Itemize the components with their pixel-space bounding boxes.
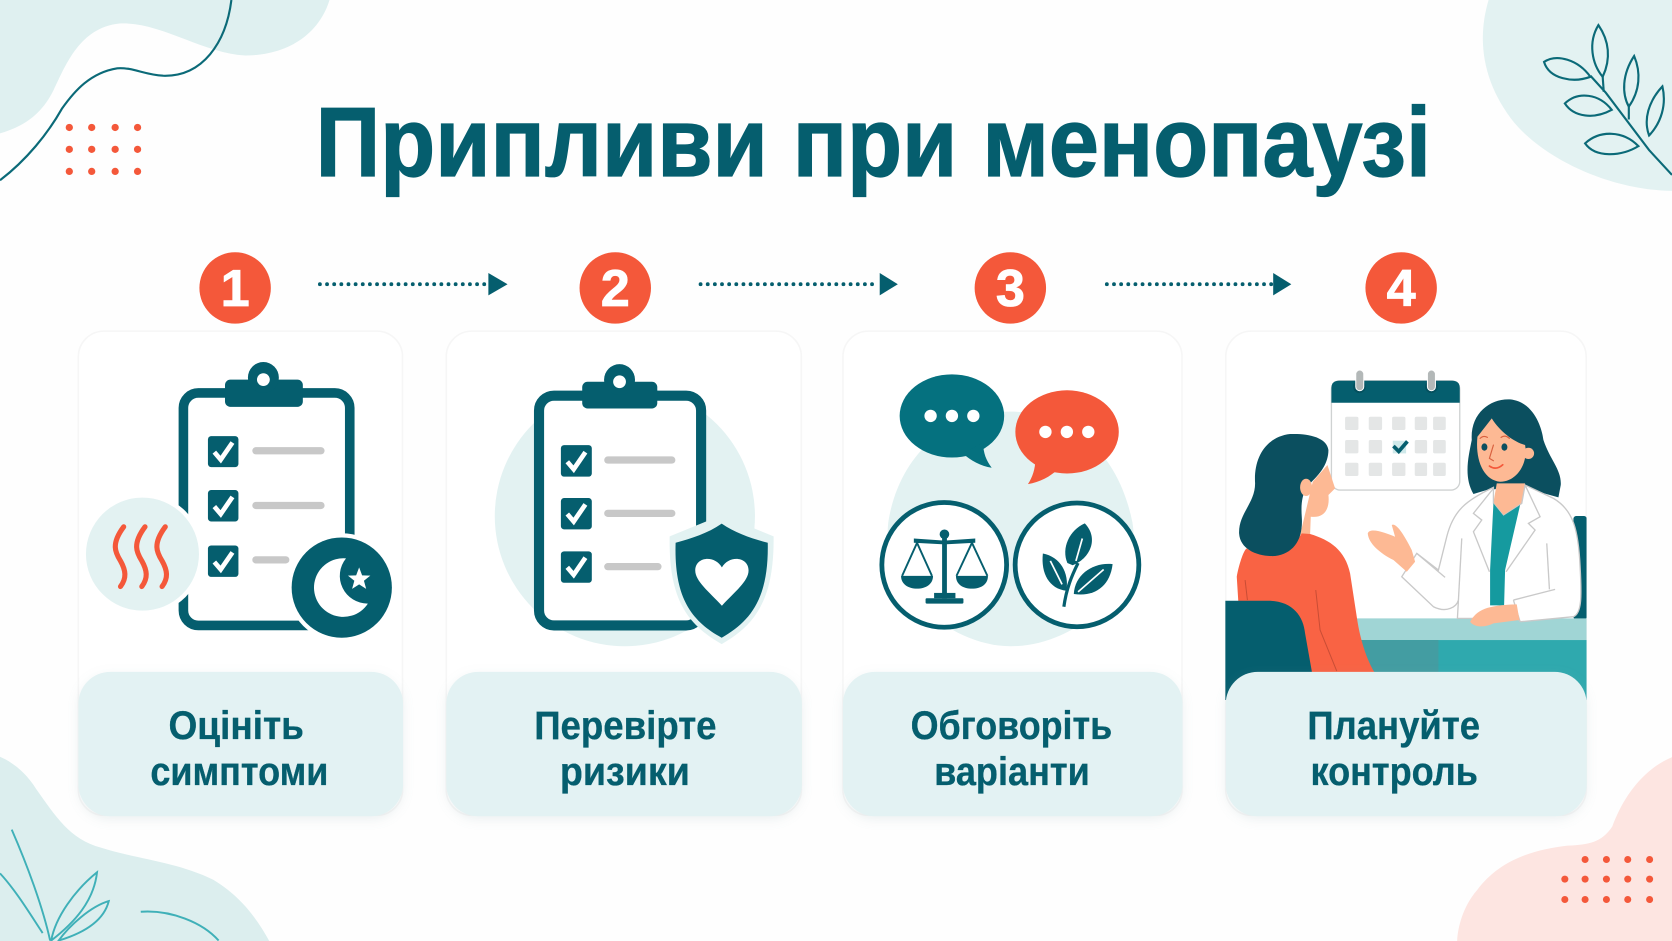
desk xyxy=(1353,516,1587,700)
icon: scales xyxy=(882,502,1007,627)
card 4: plan monitoring xyxy=(1225,331,1587,816)
icon: moon and star xyxy=(287,533,396,642)
calendar xyxy=(1331,370,1460,490)
icon: plant xyxy=(1015,503,1139,627)
icon: symptom clipboard xyxy=(183,362,350,625)
label panel 2: Перевірте xyxy=(534,704,717,748)
background blob xyxy=(888,412,1134,646)
label panel 3: Обговоріть xyxy=(911,704,1112,748)
label panel 4: Плануйте xyxy=(1307,704,1480,748)
decor: top-left blob with wavy line and dots xyxy=(0,0,329,180)
patient xyxy=(1225,434,1375,700)
icon: orange speech bubble xyxy=(1015,390,1119,484)
step badge 4: 4 xyxy=(1387,260,1416,318)
label panel 2 xyxy=(446,672,802,816)
label panel 3: варіанти xyxy=(934,750,1090,794)
icon: risk clipboard xyxy=(539,364,701,625)
label panel 2: ризики xyxy=(560,750,690,794)
step badge 4 xyxy=(1365,252,1437,324)
step badge 2 xyxy=(580,252,651,324)
icon: heat waves xyxy=(82,493,203,615)
label panel 1: симптоми xyxy=(150,750,328,794)
arrow 2 to 3 xyxy=(701,273,898,295)
label panel 3 xyxy=(843,672,1183,816)
card 1: assess symptoms xyxy=(78,331,403,816)
illustration: doctor consultation xyxy=(1225,370,1587,700)
doctor xyxy=(1368,399,1581,626)
step badge 2: 2 xyxy=(601,260,630,318)
icon: shield with heart xyxy=(670,515,774,644)
icon: teal speech bubble xyxy=(900,374,1004,468)
step badge 3 xyxy=(975,252,1046,324)
label panel 1 xyxy=(78,672,403,816)
decor: top-right blob with leaf branch xyxy=(1483,0,1672,191)
label panel 4: контроль xyxy=(1311,750,1478,794)
step badge 3: 3 xyxy=(996,260,1025,318)
arrow 3 to 4 xyxy=(1107,273,1291,295)
arrow 1 to 2 xyxy=(320,273,508,295)
label panel 1: Оцініть xyxy=(168,704,304,748)
decor: bottom-right pink blob with dots xyxy=(1457,757,1672,941)
label panel 4 xyxy=(1226,672,1587,816)
decor: bottom-left blob with grass leaves xyxy=(0,757,269,941)
step badge 1: 1 xyxy=(221,260,250,318)
title: Припливи при менопаузі xyxy=(316,87,1431,197)
card 3: discuss options xyxy=(843,331,1183,816)
background circle xyxy=(495,386,755,646)
step badge 1 xyxy=(199,252,271,324)
card 2: check risks xyxy=(446,331,802,816)
